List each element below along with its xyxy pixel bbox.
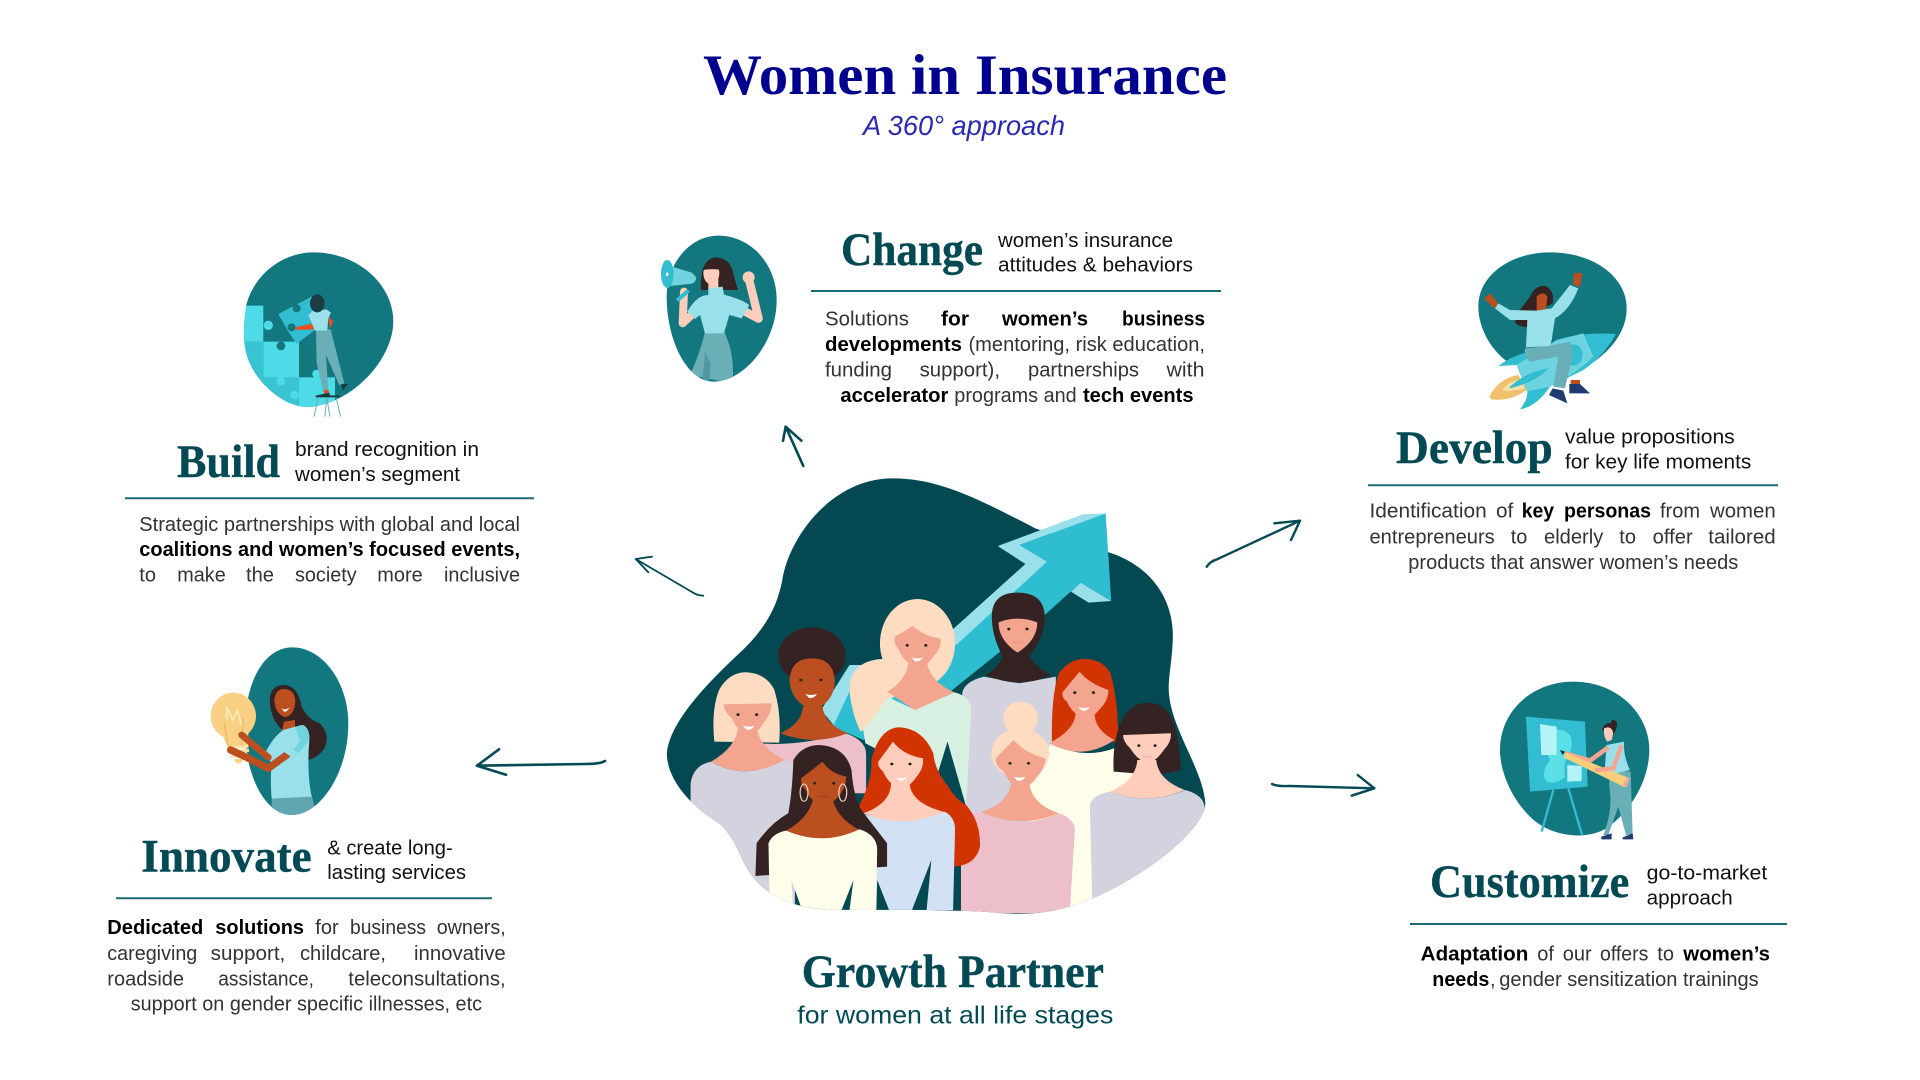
woman with long dark hair and hoops (755, 745, 887, 910)
body text: from (1660, 501, 1700, 523)
tagline: & create long- (327, 836, 453, 859)
body text: elderly (1544, 526, 1603, 548)
body text: more (377, 565, 423, 587)
body text: the (246, 565, 274, 587)
panel: innovate (107, 647, 506, 1016)
tagline (294, 438, 479, 486)
body text: Identification (1370, 501, 1487, 523)
icon: woman holding light bulb (211, 647, 348, 817)
body text: developments (825, 334, 962, 356)
body text: to (1657, 944, 1674, 966)
hero: group of diverse women with growth arrow (667, 478, 1205, 914)
body text: of (1537, 944, 1554, 966)
body text (825, 309, 1205, 407)
body text: business (350, 917, 426, 939)
icon: woman with megaphone (661, 236, 777, 383)
body text: women (1709, 501, 1776, 523)
growth arrow (821, 513, 1111, 740)
body text: innovative (414, 943, 506, 965)
tagline (1647, 861, 1768, 909)
body text: tech events (1083, 385, 1194, 407)
body text: for (941, 309, 969, 331)
body text: accelerator (840, 385, 949, 407)
arrow: to change (783, 427, 803, 466)
body text: women’s (1682, 944, 1770, 966)
body text: assistance, (218, 968, 314, 990)
body text: owners, (437, 917, 506, 939)
title: Women in Insurance (703, 44, 1227, 107)
tagline: value propositions (1565, 425, 1735, 448)
body text: offer (1653, 526, 1693, 548)
panel: build (125, 252, 534, 587)
body text: (mentoring, risk education, (968, 334, 1205, 356)
body text: , (1490, 969, 1496, 991)
subtitle: A 360° approach (861, 110, 1065, 141)
body text: childcare, (300, 943, 386, 965)
body text: Solutions (825, 309, 909, 331)
body text (1421, 944, 1770, 991)
body text: tailored (1708, 526, 1776, 548)
tagline (327, 836, 466, 884)
body text: inclusive (444, 565, 520, 587)
arrow: to customize (1272, 775, 1374, 796)
tagline: go-to-market (1647, 861, 1768, 884)
body text: Adaptation (1421, 944, 1528, 966)
heading: Customize: Customize (1430, 856, 1629, 908)
heading: Build: Build (177, 436, 280, 488)
body text: for (315, 917, 339, 939)
body text: gender sensitization trainings (1499, 969, 1759, 991)
body text: to (1619, 526, 1636, 548)
tagline: women’s segment (294, 463, 460, 486)
body text: needs (1432, 969, 1489, 991)
body text: our (1563, 944, 1592, 966)
body text: to (139, 565, 156, 587)
heading: Develop: Develop (1396, 422, 1553, 474)
panel: develop (1368, 252, 1778, 574)
tagline: lasting services (327, 861, 466, 884)
body text (139, 514, 520, 587)
tagline (997, 229, 1193, 276)
footer tagline: for women at all life stages (797, 1001, 1113, 1029)
woman with black bob (1090, 703, 1204, 913)
body text: key (1522, 501, 1555, 523)
woman with blonde bob (691, 672, 795, 913)
body text: of (1496, 501, 1514, 523)
tagline (1565, 425, 1751, 473)
woman with red hair, back row (1029, 659, 1138, 910)
body text: teleconsultations, (348, 968, 506, 990)
icon: woman drawing on easel (1500, 682, 1649, 839)
body text: products that answer women’s needs (1408, 552, 1738, 574)
body text: roadside (107, 968, 184, 990)
body text: coalitions and women’s focused events, (139, 539, 520, 561)
woman with afro (759, 627, 866, 793)
body text: women’s (1001, 309, 1088, 331)
tagline: women’s insurance (997, 229, 1173, 252)
heading: Innovate: Innovate (141, 830, 312, 882)
body text: offers (1600, 944, 1648, 966)
tagline: brand recognition in (295, 438, 479, 461)
body text: entrepreneurs (1370, 526, 1495, 548)
icon: woman riding rocket (1478, 252, 1627, 409)
arrow: to develop (1207, 521, 1300, 567)
body text: support on gender specific illnesses, etc (131, 994, 482, 1016)
body text: support, (211, 943, 285, 965)
panel: change (661, 224, 1221, 407)
body text: caregiving (107, 943, 197, 965)
arrow: to build (636, 557, 703, 596)
tagline: for key life moments (1565, 450, 1751, 473)
icon: woman assembling puzzle (242, 252, 393, 417)
body text: business (1122, 309, 1205, 331)
body text: programs and (954, 385, 1077, 407)
tagline: attitudes & behaviors (998, 254, 1193, 276)
body text: funding (825, 360, 892, 382)
arrow: to innovate (477, 749, 605, 775)
body text: make (177, 565, 226, 587)
heading: Change: Change (841, 224, 983, 276)
body text: Dedicated (107, 917, 203, 939)
body text: solutions (215, 917, 304, 939)
body text: Strategic partnerships with global and local (139, 514, 520, 536)
body text: personas (1564, 501, 1651, 523)
woman with hijab (962, 593, 1056, 827)
footer heading: Growth Partner: Growth Partner (802, 946, 1104, 998)
body text: support), (920, 360, 1000, 382)
body text: society (295, 565, 357, 587)
body text (107, 917, 506, 1016)
woman with top knot (961, 702, 1075, 913)
tagline: approach (1647, 886, 1733, 909)
woman with long red hair (853, 727, 980, 910)
panel: customize (1410, 682, 1787, 991)
body text: with (1165, 360, 1204, 382)
body text: to (1511, 526, 1527, 548)
woman with long blonde hair (850, 599, 971, 807)
body text (1370, 501, 1776, 574)
body text: partnerships (1028, 360, 1139, 382)
